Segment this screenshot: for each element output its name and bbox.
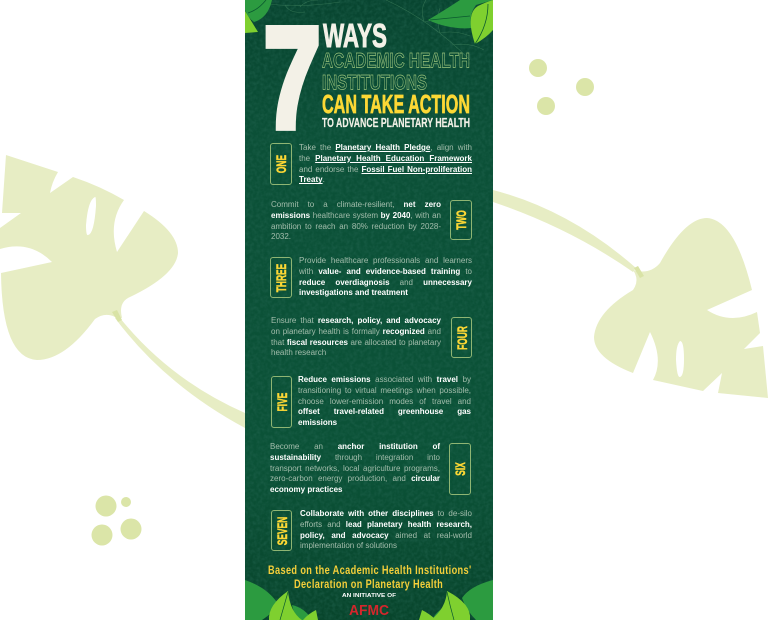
text: four: on planetary health is formally recognized and — [271, 327, 441, 336]
text: seven: implementation of solutions — [300, 541, 397, 550]
WAYS: WAYS — [323, 17, 387, 54]
badge: three — [270, 257, 292, 298]
text: five: Reduce emissions associated with travel by — [298, 375, 471, 384]
text: seven: efforts and lead planetary health research, — [300, 520, 472, 529]
subheading: TO ADVANCE PLANETARY HEALTH — [322, 116, 470, 130]
text: two: ambition to reach an 80% reduction by 2028- — [271, 222, 441, 231]
text: five: offset travel-related greenhouse gas — [298, 407, 471, 416]
item one — [270, 143, 472, 185]
text: two — [271, 200, 441, 241]
text: six: Become an anchor institution of — [270, 442, 440, 451]
text: one — [299, 143, 472, 184]
text: five: emissions — [298, 418, 337, 427]
text: two: emissions healthcare system by 2040, with an — [271, 211, 441, 220]
text: four: that fiscal resources are allocated to planetary — [271, 338, 441, 347]
left monstera leaf — [0, 155, 245, 428]
text: two: Commit to a climate-resilient, net zero — [271, 200, 441, 209]
text: four: health research — [271, 348, 326, 357]
text: five: choose lower-emission modes of travel and — [298, 397, 471, 406]
badge: seven: SEVEN — [274, 516, 290, 545]
item seven — [271, 509, 472, 551]
initiative label: AN INITIATIVE OF — [342, 593, 397, 599]
badge: six: SIX — [452, 462, 468, 476]
badge: four: FOUR — [454, 326, 470, 349]
badge: two — [450, 200, 472, 240]
bottom left leaves — [245, 580, 318, 620]
text: two: 2032. — [271, 232, 291, 241]
badge: one — [270, 143, 292, 185]
text: seven: Collaborate with other disciplines to de-silo — [300, 509, 472, 518]
item six — [270, 442, 471, 495]
source line one: Based on the Academic Health Institutions' — [268, 565, 471, 577]
item two — [271, 200, 472, 241]
right monstera leaf — [493, 190, 768, 398]
faint line-art branches — [270, 0, 484, 60]
text: one: and endorse the Fossil Fuel Non-proliferation — [299, 165, 472, 174]
text: one: Take the Planetary Health Pledge, align with — [299, 143, 472, 152]
text: three: with value- and evidence-based training to — [299, 267, 472, 276]
yellow heading: CAN TAKE ACTION — [322, 89, 470, 119]
decorative corner leaves — [245, 0, 493, 620]
outlined heading line one: ACADEMIC HEALTH — [322, 48, 470, 72]
badge: two: TWO — [453, 210, 469, 230]
big numeral 7: 7 — [264, 0, 320, 158]
text: five: transitioning to virtual meetings when possible, — [298, 386, 471, 395]
item four — [271, 316, 472, 358]
text: six: economy practices — [270, 485, 342, 494]
badge: six — [449, 443, 471, 495]
AFMC logo: AFMC — [349, 603, 389, 619]
bottom left dots — [92, 496, 142, 546]
top right leaves — [428, 0, 493, 44]
item five — [271, 375, 471, 428]
text: three — [299, 256, 472, 297]
source line two: Declaration on Planetary Health — [294, 579, 443, 591]
top left leaves — [245, 0, 272, 33]
text: six: zero-carbon energy production, and circular — [270, 474, 440, 483]
outlined heading line two: INSTITUTIONS — [322, 70, 427, 94]
text: seven — [300, 509, 472, 550]
text: three: investigations and treatment — [299, 288, 408, 297]
text: three: Provide healthcare professionals and learners — [299, 256, 472, 265]
text: one: the Planetary Health Education Framework — [299, 154, 472, 163]
bottom right leaves — [419, 580, 493, 620]
badge: seven — [271, 510, 292, 551]
badge: five — [271, 376, 292, 428]
item three — [270, 256, 472, 298]
text: five — [298, 375, 471, 427]
text: six: transport networks, local agriculture programs, — [270, 464, 440, 473]
text: seven: policy, and advocacy aimed at real-world — [300, 531, 472, 540]
text: three: reduce overdiagnosis and unnecessary — [299, 278, 472, 287]
text: four: Ensure that research, policy, and advocacy — [271, 316, 441, 325]
badge: three: THREE — [273, 263, 289, 292]
text: six — [270, 442, 440, 494]
text: one: Treaty. — [299, 175, 325, 184]
badge: four — [451, 317, 472, 358]
text: six: sustainability through integration into — [270, 453, 440, 462]
badge: one: ONE — [273, 155, 289, 173]
text: four — [271, 316, 441, 357]
top right dots — [529, 59, 594, 115]
badge: five: FIVE — [274, 393, 290, 411]
